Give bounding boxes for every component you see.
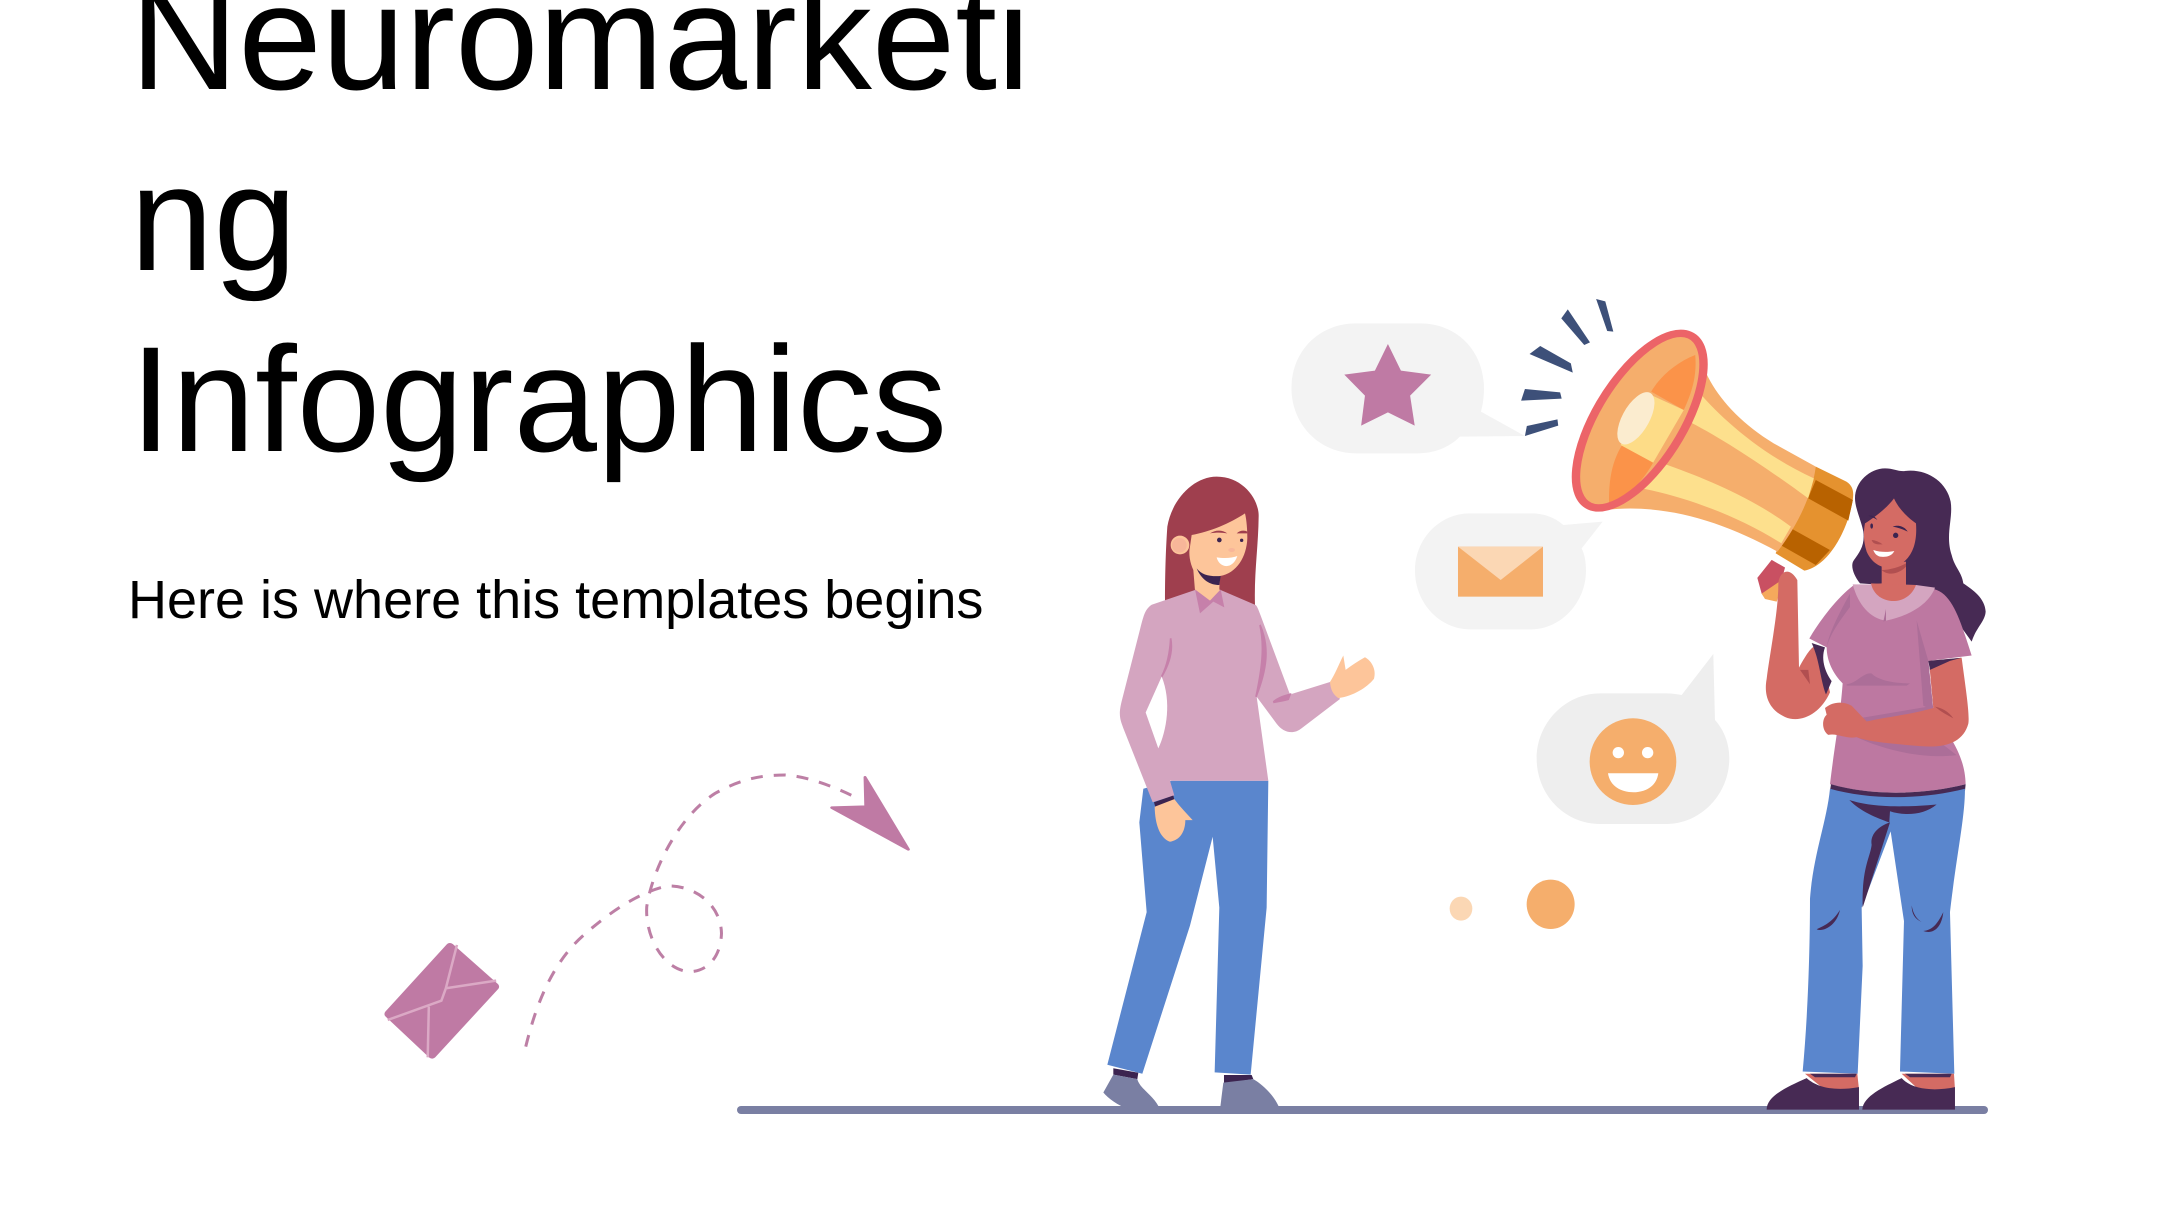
title xyxy=(130,0,1030,483)
icon: paper plane arrow head xyxy=(832,777,908,849)
ground line xyxy=(737,1106,1988,1114)
megaphone xyxy=(1550,318,1853,571)
speech bubble: smiley xyxy=(1537,654,1729,824)
title: Infographics xyxy=(130,315,947,483)
character: woman holding megaphone xyxy=(1757,468,1986,1110)
decorative dots xyxy=(1450,880,1575,929)
speech bubble: star xyxy=(1291,323,1525,453)
character: woman with long red hair xyxy=(1103,477,1375,1110)
sound rays xyxy=(1521,299,1613,436)
icon: tilted envelope xyxy=(388,945,496,1057)
dashed flight path xyxy=(526,775,858,1047)
speech bubble: envelope xyxy=(1415,513,1603,629)
subtitle: Here is where this templates begins xyxy=(128,570,983,630)
title: ng xyxy=(130,134,297,302)
